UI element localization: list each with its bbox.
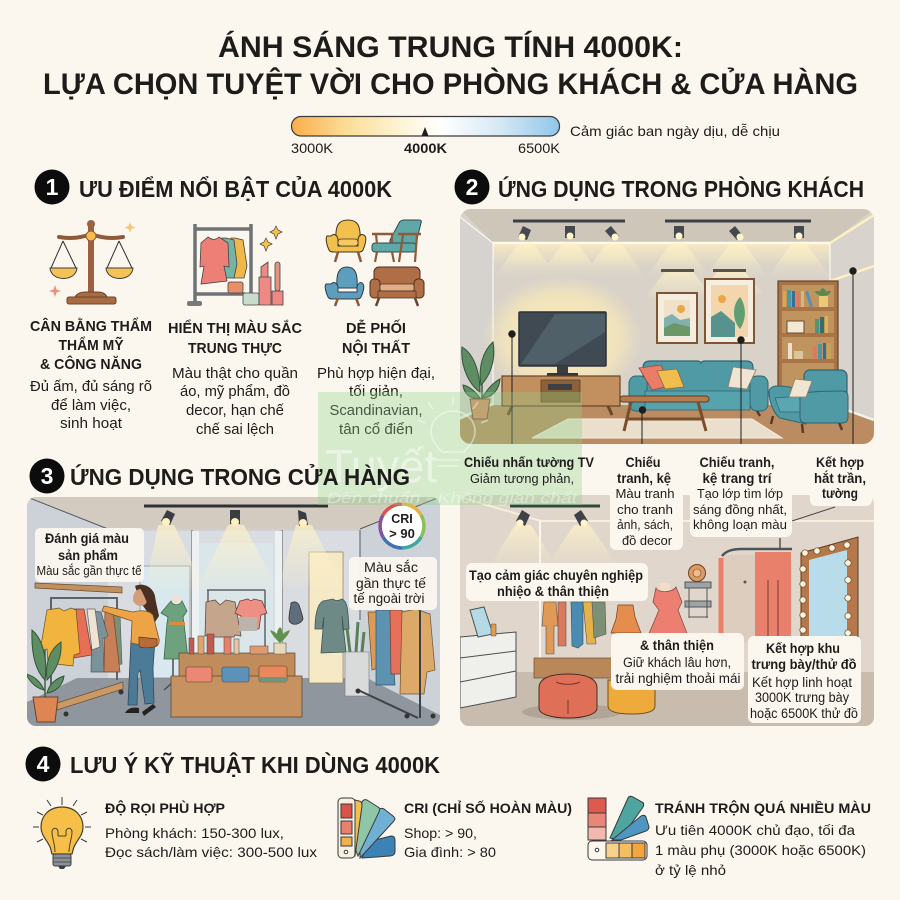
panel: advantages xyxy=(30,220,435,438)
store track lights xyxy=(144,506,344,595)
label: cove lighting: hắt trần, xyxy=(814,471,866,486)
heading 3: 3 xyxy=(41,463,53,489)
label: decorative painting xyxy=(690,449,792,537)
label: decorative painting: không loạn màu xyxy=(693,517,787,532)
heading 1: ƯU ĐIỂM NỔI BẬT CỦA 4000K xyxy=(79,174,392,202)
label: decorative painting: Chiếu tranh, xyxy=(700,455,774,470)
title: ÁNH SÁNG TRUNG TÍNH 4000K: xyxy=(218,30,683,64)
heading 4: 4 xyxy=(37,751,50,777)
plant xyxy=(462,342,500,419)
hanging tops xyxy=(204,589,268,646)
callout: assess product colour: Màu sắc gần thực tế xyxy=(36,563,142,578)
badge: CRI above 90: CRI xyxy=(391,512,413,526)
callout pointers xyxy=(509,268,856,450)
boutique track lights xyxy=(500,504,606,558)
heading 3 xyxy=(30,458,410,494)
dresses and shelf xyxy=(611,564,711,636)
colour temperature scale xyxy=(291,116,780,156)
heading 2: ỨNG DỤNG TRONG PHÒNG KHÁCH xyxy=(498,175,864,202)
bookshelf xyxy=(778,281,838,393)
label: accent TV wall xyxy=(464,455,594,486)
text: true colours: TRUNG THỰC xyxy=(188,340,282,357)
callout: friendly xyxy=(611,633,744,690)
text: balance xyxy=(30,317,152,432)
text: balance: & CÔNG NĂNG xyxy=(40,355,142,373)
title xyxy=(43,30,858,101)
callout: display and fitting area: Kết hợp linh hoạt xyxy=(752,675,852,690)
poufs xyxy=(522,674,655,720)
callout: assess product colour: Đánh giá màu xyxy=(45,531,129,546)
label: decorative painting: kệ trang trí xyxy=(702,471,773,486)
sofa xyxy=(629,361,768,416)
label: accent TV wall: Chiếu nhấn tường TV xyxy=(464,455,594,470)
callout: professional feeling: Tạo cảm giác chuyên nghiệp xyxy=(469,567,643,583)
bag and dress in mirror xyxy=(289,599,349,653)
watermark: Tuyết xyxy=(325,440,437,492)
heading 2 xyxy=(454,170,864,204)
badge: CRI above 90: > 90 xyxy=(389,526,415,541)
text: true colours: chế sai lệch xyxy=(196,422,274,438)
text: furniture: Phù hợp hiện đại, xyxy=(317,366,435,382)
callout: colours close to reality: Màu sắc xyxy=(364,560,418,575)
title: LỰA CHỌN TUYỆT VỜI CHO PHÒNG KHÁCH & CỬA HÀNG xyxy=(43,67,858,101)
label: accent TV wall: Giảm tương phản, xyxy=(470,471,574,486)
text: furniture xyxy=(317,319,435,438)
display bench xyxy=(534,658,614,678)
colour temperature scale: Cảm giác ban ngày dịu, dễ chịu xyxy=(570,123,780,139)
text: illuminance: ĐỘ RỌI PHÙ HỢP xyxy=(105,799,225,816)
icon: colour swatch fan xyxy=(338,798,395,858)
text: furniture: tân cổ điển xyxy=(339,422,413,438)
label: painting and shelf: Chiếu xyxy=(626,455,660,470)
text: avoid mixing colours: 1 màu phụ (3000K hoặc 6500K) xyxy=(655,842,866,858)
text: avoid mixing colours: TRÁNH TRỘN QUÁ NHIỀU MÀU xyxy=(655,799,871,816)
text: avoid mixing colours xyxy=(655,799,871,878)
panel: boutique illustration xyxy=(460,495,874,726)
text: CRI: Shop: > 90, xyxy=(404,825,477,841)
callout: display and fitting area xyxy=(748,636,861,723)
left clothes rack xyxy=(35,583,124,716)
icon: balance scale xyxy=(49,220,136,304)
icon: furniture set xyxy=(325,220,424,306)
text: true colours: Màu thật cho quần xyxy=(172,366,298,382)
text: avoid mixing colours: ở tỷ lệ nhỏ xyxy=(655,862,726,878)
badge: CRI above 90 xyxy=(380,504,424,548)
callout: friendly: trải nghiệm thoải mái xyxy=(616,671,740,686)
text: balance: Đủ ấm, đủ sáng rõ xyxy=(30,379,152,395)
text: true colours: decor, hạn chế xyxy=(186,403,284,419)
heading 4: LƯU Ý KỸ THUẬT KHI DÙNG 4000K xyxy=(70,751,440,778)
text: furniture: tối giản, xyxy=(349,384,403,400)
heading 4 xyxy=(26,746,440,782)
text: avoid mixing colours: Ưu tiên 4000K chủ đạo, tối đa xyxy=(655,822,855,838)
text: balance: CÂN BẰNG THẨM xyxy=(30,317,152,335)
track lights xyxy=(504,220,822,266)
callout: professional feeling xyxy=(466,563,648,601)
heading 1: 1 xyxy=(46,174,59,200)
icon: light bulb xyxy=(33,797,91,869)
text: CRI xyxy=(404,799,572,860)
callout: colours close to reality: tế ngoài trời xyxy=(354,591,425,606)
text: true colours: áo, mỹ phẩm, đồ xyxy=(180,384,290,400)
text: furniture: DỄ PHỐI xyxy=(346,319,406,337)
text: illuminance: Phòng khách: 150-300 lux, xyxy=(105,825,284,841)
display table with products xyxy=(171,627,302,717)
dresser with vanity mirror xyxy=(460,607,516,708)
hanging clothes xyxy=(542,602,606,654)
colour temperature scale: 6500K xyxy=(518,141,560,156)
callout: friendly: & thân thiện xyxy=(640,638,714,653)
callout: display and fitting area: 3000K trưng bày xyxy=(755,690,849,705)
callout: display and fitting area: trưng bày/thử đồ xyxy=(752,657,856,672)
colour temperature scale: 4000K xyxy=(404,141,447,156)
panel: living room illustration xyxy=(460,209,874,450)
text: true colours xyxy=(168,319,302,438)
text: CRI: CRI (CHỈ SỐ HOÀN MÀU) xyxy=(404,799,572,816)
text: balance: sinh hoạt xyxy=(60,416,122,432)
label: painting and shelf: cho tranh xyxy=(617,502,673,517)
callout: professional feeling: nhiệo & thân thiện xyxy=(497,583,609,599)
wall art with picture lights xyxy=(643,269,763,343)
text: illuminance xyxy=(105,799,317,860)
heading 2: 2 xyxy=(466,174,478,200)
callout: display and fitting area: hoặc 6500K thử đồ xyxy=(750,706,858,721)
mannequin in green dress xyxy=(161,596,188,690)
label: painting and shelf xyxy=(610,449,683,550)
text: illuminance: Đọc sách/làm việc: 300-500 lux xyxy=(105,844,317,860)
label: cove lighting xyxy=(810,449,872,506)
label: painting and shelf: tranh, kệ xyxy=(617,471,671,486)
label: cove lighting: Kết hợp xyxy=(816,455,864,470)
text: CRI: Gia đình: > 80 xyxy=(404,844,496,860)
heading 3: ỨNG DỤNG TRONG CỬA HÀNG xyxy=(70,462,410,490)
label: painting and shelf: Màu tranh xyxy=(616,486,674,501)
watermark: Đèn chuẩn - Không gian chất xyxy=(327,490,578,507)
plant xyxy=(26,630,64,722)
watermark xyxy=(318,392,582,507)
text: balance: để làm việc, xyxy=(51,398,131,414)
panel: technical notes xyxy=(33,796,871,878)
label: decorative painting: sáng đồng nhất, xyxy=(693,502,787,517)
TV console xyxy=(502,376,620,415)
heading 1 xyxy=(34,170,392,204)
icon: clothes rack and cosmetics xyxy=(187,224,283,306)
colour temperature scale: 3000K xyxy=(291,141,333,156)
label: painting and shelf: ảnh, sách, xyxy=(617,517,673,532)
callout: colours close to reality: gần thực tế xyxy=(356,576,426,591)
icon: colour palette swatches xyxy=(588,796,649,860)
lighted mirror xyxy=(800,537,858,642)
text: balance: THẨM MỸ xyxy=(58,336,124,354)
fitting room xyxy=(721,538,792,643)
armchair xyxy=(769,370,848,433)
label: painting and shelf: đồ decor xyxy=(622,533,673,548)
text: true colours: HIỂN THỊ MÀU SẮC xyxy=(168,319,302,337)
right clothes rack xyxy=(345,609,436,718)
shopper xyxy=(102,585,159,716)
callout: assess product colour: sản phẩm xyxy=(58,548,118,563)
TV with backlight xyxy=(490,283,633,376)
callout: assess product colour xyxy=(35,528,144,582)
text: furniture: NỘI THẤT xyxy=(342,339,410,357)
callout: colours close to reality xyxy=(349,557,437,610)
callout: friendly: Giữ khách lâu hơn, xyxy=(623,655,731,670)
callout: display and fitting area: Kết hợp khu xyxy=(766,641,840,656)
text: furniture: Scandinavian, xyxy=(330,403,422,419)
panel: store illustration xyxy=(26,497,440,726)
label: decorative painting: Tạo lớp tìm lớp xyxy=(697,486,783,501)
coffee table xyxy=(620,396,709,431)
label: cove lighting: tường xyxy=(822,486,858,501)
